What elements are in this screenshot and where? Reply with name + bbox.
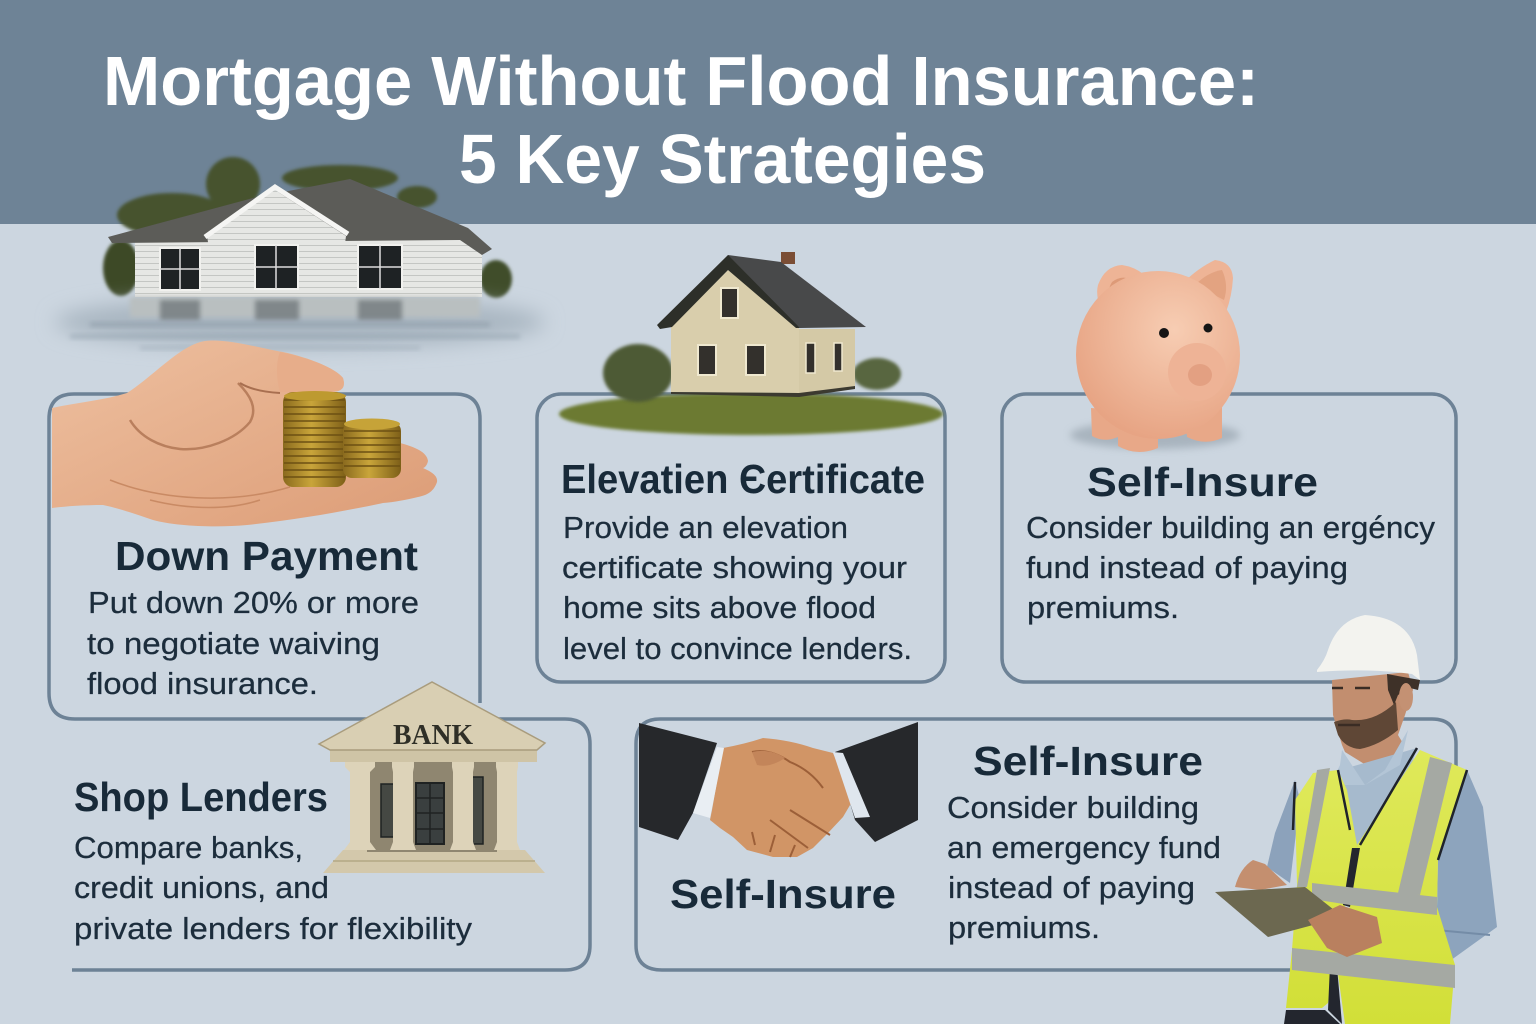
icon: hand holding coins — [52, 340, 437, 526]
heading: self-insure top: Self-Insure — [1087, 459, 1318, 505]
neck and head — [1332, 672, 1413, 775]
panel: self-insure top — [1002, 394, 1456, 682]
panel: shop lenders — [72, 719, 590, 970]
heading: self-insure bottom: Self-Insure — [973, 738, 1203, 784]
illustration: flooded house — [55, 157, 545, 350]
text: elevation certificate — [562, 510, 912, 666]
reflective stripes — [1292, 757, 1455, 988]
text: down payment: to negotiate waiving — [87, 626, 380, 661]
clipboard — [1215, 887, 1343, 937]
text: shop lenders — [74, 830, 473, 946]
panel: down payment — [49, 394, 480, 719]
vest — [1286, 770, 1357, 1008]
title: 5 Key Strategies — [459, 120, 986, 198]
text: shop lenders: credit unions, and — [74, 870, 329, 905]
icon: piggy bank — [1070, 260, 1240, 452]
text: down payment: Put down 20% or more — [88, 585, 419, 620]
text: shop lenders: private lenders for flexibility — [74, 911, 473, 946]
illustration: elevated house on grass — [559, 252, 943, 435]
heading: shop lenders: Shop Lenders — [74, 774, 328, 820]
title: Mortgage Without Flood Insurance: — [103, 42, 1259, 120]
icon: handshake — [639, 722, 918, 857]
shirt chest and collar — [1340, 748, 1417, 850]
holding hand — [1308, 905, 1382, 957]
text: down payment: flood insurance. — [87, 666, 318, 701]
icon: bank building — [319, 682, 545, 873]
panel: elevation certificate — [537, 394, 945, 682]
text: self-insure bottom: an emergency fund — [947, 830, 1221, 865]
text: self-insure bottom: instead of paying — [948, 870, 1195, 905]
flood water — [70, 297, 520, 350]
heading: elevation certificate: Elevatien Єertificate — [561, 456, 925, 502]
text: self-insure top: Consider building an ergéncy — [1026, 510, 1435, 545]
label: bank: BANK — [393, 720, 473, 751]
panel: self-insure bottom — [636, 719, 1456, 970]
text: self-insure bottom — [947, 790, 1221, 945]
text: elevation certificate: Provide an elevation — [563, 510, 848, 545]
header band — [0, 0, 1536, 224]
title — [103, 42, 1259, 198]
text: self-insure bottom: Consider building — [947, 790, 1199, 825]
heading: down payment: Down Payment — [115, 533, 418, 579]
text: elevation certificate: home sits above flood — [563, 590, 876, 625]
illustration: inspector with clipboard — [1215, 615, 1497, 1024]
text: self-insure top — [1026, 510, 1435, 625]
text: elevation certificate: level to convince lenders. — [563, 631, 912, 666]
writing hand — [1235, 860, 1287, 890]
text: self-insure top: fund instead of paying — [1026, 550, 1348, 585]
hard hat — [1317, 615, 1420, 680]
text: self-insure top: premiums. — [1027, 590, 1179, 625]
text: elevation certificate: certificate showing your — [562, 550, 907, 585]
text: shop lenders: Compare banks, — [74, 830, 303, 865]
text: down payment — [87, 585, 419, 701]
heading: self-insure handshake: Self-Insure — [670, 871, 896, 917]
sleeves — [1267, 780, 1300, 883]
text: self-insure bottom: premiums. — [948, 910, 1100, 945]
